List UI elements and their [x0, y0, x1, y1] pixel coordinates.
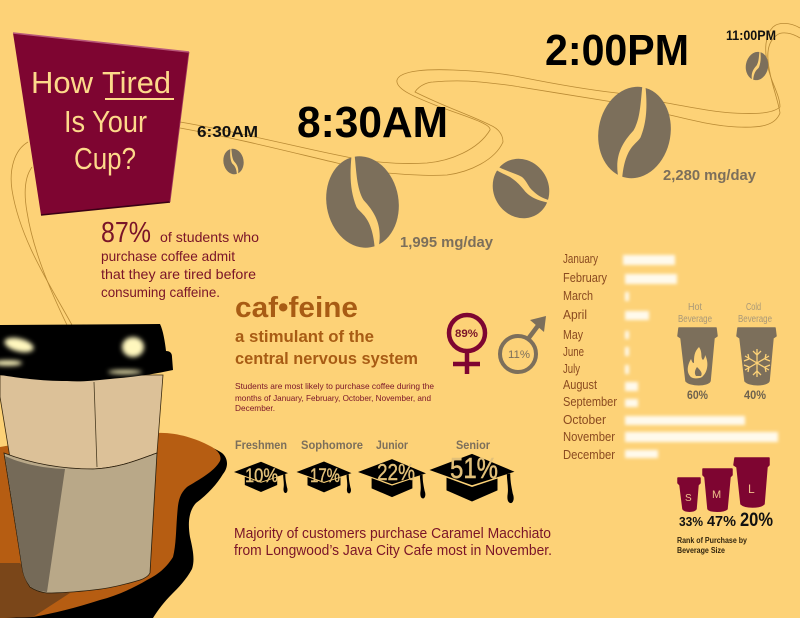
class labels: Freshmen	[235, 440, 287, 452]
months note	[235, 381, 434, 413]
stat: 87% of students: 87%	[101, 217, 151, 249]
month labels: February	[563, 271, 608, 285]
stat: 87% of students	[101, 217, 259, 300]
cup seam	[94, 382, 97, 467]
male symbol 11%: 11%	[508, 349, 530, 361]
bean: 2:00PM	[591, 81, 678, 184]
time: 11:00PM: 11:00PM	[726, 27, 776, 43]
female symbol 89%	[449, 315, 485, 374]
cold beverage cup: Cold	[746, 302, 761, 313]
cup: large: L	[748, 482, 755, 496]
monthly purchases bar chart	[563, 252, 778, 462]
month labels: December	[563, 448, 615, 462]
hot beverage cup: Beverage	[678, 314, 712, 325]
caffeine amount: 1,995 mg/day: 1,995 mg/day	[400, 234, 494, 251]
time: 6:30AM: 6:30AM	[197, 124, 258, 141]
title text	[31, 65, 171, 176]
time: 2:00PM: 2:00PM	[545, 26, 689, 75]
title text: Is Your	[64, 104, 147, 139]
cup: medium: M	[712, 489, 721, 501]
month labels: May	[563, 328, 584, 342]
cup body	[0, 375, 163, 469]
month labels: July	[563, 362, 581, 376]
caramel macchiato note: from Longwood’s Java City Cafe most in November.	[234, 543, 552, 559]
caffeine amount: 2,280 mg/day: 2,280 mg/day	[663, 167, 757, 184]
size caption: Rank of Purchase by	[677, 536, 747, 545]
beverage size cups	[677, 458, 773, 555]
female symbol 89%: 89%	[455, 328, 478, 340]
sleeve shading	[5, 456, 65, 592]
month labels: March	[563, 289, 593, 303]
bean: midday	[482, 148, 560, 229]
months note: December.	[235, 403, 275, 413]
table spill	[0, 433, 221, 618]
grad cap: senior 51%: 51%	[450, 453, 498, 485]
caramel macchiato note	[234, 526, 552, 559]
hot beverage cup: Hot	[688, 302, 702, 313]
size percentages: 47%	[707, 513, 736, 530]
grad cap: sophomore 17%	[296, 462, 352, 493]
caffeine definition heading: a stimulant of the	[235, 327, 374, 346]
icon: snowflake	[744, 349, 770, 377]
sign: title	[13, 33, 189, 215]
month labels: October	[563, 413, 606, 427]
cold beverage cup: 40%	[744, 388, 766, 402]
title text: How	[31, 65, 94, 100]
caffeine definition heading: central nervous system	[235, 349, 418, 368]
months note: months of January, February, October, November, and	[235, 393, 431, 403]
table spill shadow	[0, 433, 227, 618]
grad cap: freshmen 10%	[234, 462, 288, 493]
month labels: September	[563, 395, 617, 409]
class labels	[235, 440, 490, 452]
lid highlights	[0, 335, 144, 374]
size percentages	[679, 510, 773, 531]
stat: 87% of students: of students who	[160, 229, 259, 245]
time: 8:30AM: 8:30AM	[297, 98, 448, 147]
stat: 87% of students: consuming caffeine.	[101, 284, 220, 300]
months note: Students are most likely to purchase coffee during the	[235, 381, 434, 391]
class labels: Junior	[376, 440, 408, 452]
month labels: August	[563, 378, 597, 392]
cup: small: S	[685, 493, 692, 504]
cup sleeve	[4, 453, 157, 593]
hot beverage cup: 60%	[687, 388, 708, 402]
size caption: Beverage Size	[677, 546, 725, 555]
title text: Tired	[102, 65, 171, 100]
steam lines	[11, 23, 800, 325]
stat: 87% of students: that they are tired before	[101, 266, 256, 282]
month labels: June	[563, 345, 584, 359]
caffeine definition heading: caf•feine	[235, 292, 358, 324]
hot beverage cup	[678, 302, 717, 402]
size caption	[677, 536, 747, 555]
class labels: Sophomore	[301, 440, 363, 452]
size percentages: 33%	[679, 514, 703, 529]
bean: 11:00PM	[744, 50, 770, 82]
sign shape	[13, 33, 189, 215]
month bars	[623, 255, 778, 458]
month labels: November	[563, 430, 615, 444]
male symbol 11%	[500, 316, 546, 372]
caffeine definition heading	[235, 292, 418, 368]
cold beverage cup: Beverage	[738, 314, 772, 325]
grad cap: junior 22%	[358, 459, 426, 499]
icon: flame	[688, 347, 707, 378]
stat: 87% of students: purchase coffee admit	[101, 248, 235, 264]
cold beverage cup	[737, 302, 776, 402]
title text: Cup?	[74, 141, 136, 176]
grad cap: sophomore 17%: 17%	[310, 466, 340, 487]
grad cap: senior 51%	[430, 453, 514, 503]
grad cap: freshmen 10%: 10%	[245, 466, 278, 487]
bean: 8:30AM	[319, 150, 406, 254]
coffee cup	[0, 324, 173, 593]
caramel macchiato note: Majority of customers purchase Caramel Macchiato	[234, 526, 551, 542]
month labels: April	[563, 308, 587, 322]
month labels: January	[563, 252, 599, 266]
class labels: Senior	[456, 440, 490, 452]
grad cap: junior 22%: 22%	[377, 459, 415, 485]
month labels	[563, 252, 617, 462]
cup lid	[0, 324, 173, 381]
bean: 6:30AM	[221, 147, 246, 176]
table shadow under cup	[0, 563, 70, 618]
size percentages: 20%	[740, 510, 773, 531]
